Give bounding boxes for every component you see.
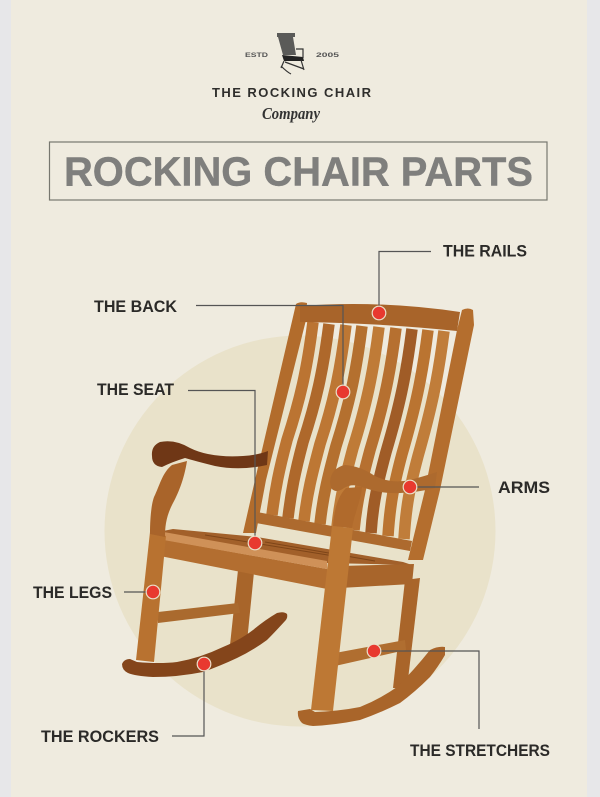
callout: the rails: THE RAILS	[443, 242, 527, 260]
seat plank lines	[205, 535, 375, 561]
callout: the rockers: THE ROCKERS	[41, 728, 159, 746]
right arm	[330, 465, 437, 493]
logo text: year: 2005	[316, 53, 340, 59]
title: ROCKING CHAIR PARTS	[64, 148, 533, 194]
logo text: established: ESTD	[245, 53, 269, 59]
callout: the back	[94, 298, 350, 399]
callout: the legs: THE LEGS	[33, 584, 112, 602]
rear left leg	[230, 570, 254, 645]
right arm support	[333, 487, 362, 528]
bottom back rail	[256, 512, 412, 551]
left front leg	[136, 532, 166, 662]
callout: the rockers	[41, 657, 211, 746]
top rail	[300, 304, 460, 331]
callout: the stretchers: THE STRETCHERS	[410, 742, 550, 760]
icon: small rocking chair	[277, 33, 304, 74]
callout: arms: ARMS	[498, 479, 550, 497]
right stretcher	[335, 640, 406, 666]
right rocker	[298, 647, 445, 726]
left stretcher	[158, 603, 240, 623]
left rocker	[122, 612, 287, 677]
callout: arms	[403, 479, 550, 497]
left arm support	[150, 461, 187, 537]
title box	[50, 142, 547, 200]
seat front edge	[158, 531, 327, 569]
logo	[212, 33, 372, 123]
callout: the legs	[33, 584, 160, 602]
seat front apron	[160, 539, 327, 589]
callout: the rails	[372, 242, 527, 320]
seat surface	[158, 529, 412, 565]
callout: the seat: THE SEAT	[97, 381, 174, 399]
callout: the back: THE BACK	[94, 298, 177, 316]
left arm	[152, 441, 268, 468]
beige circle	[104, 336, 496, 726]
callout: the seat	[97, 381, 262, 550]
back slats	[272, 322, 444, 539]
right front leg	[311, 526, 353, 711]
back left post	[243, 302, 307, 533]
rear right leg	[393, 578, 420, 688]
illustration: rocking chair	[122, 302, 474, 726]
back right post	[408, 308, 474, 560]
company name: THE ROCKING CHAIR	[212, 85, 372, 100]
seat right apron	[340, 564, 414, 588]
callout: the stretchers	[367, 644, 550, 760]
company script: Company	[262, 104, 320, 123]
